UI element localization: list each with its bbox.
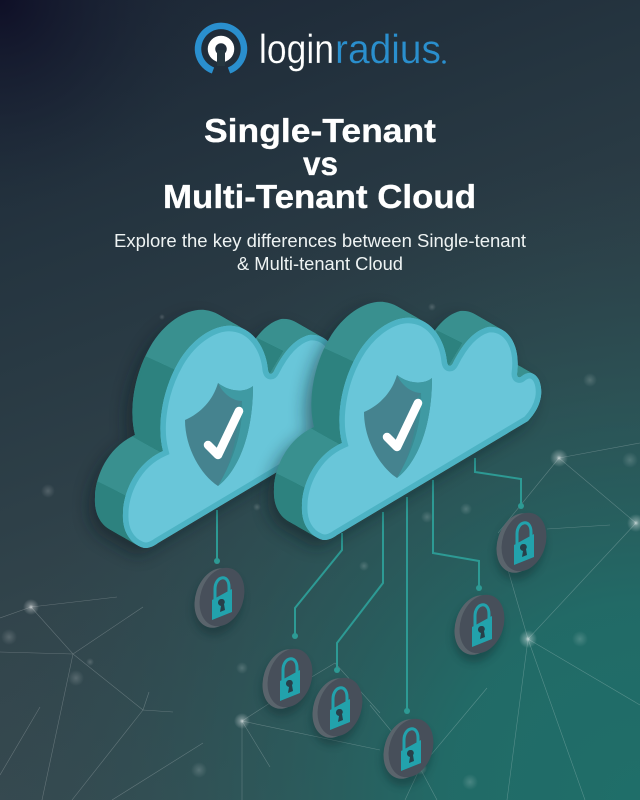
icon: logo ring — [198, 26, 244, 71]
cloud: left with shield and check — [89, 310, 362, 555]
lock: second — [253, 643, 320, 723]
logo: loginradius — [198, 26, 446, 72]
subtitle: & Multi-tenant Cloud — [237, 253, 403, 274]
title: Single-Tenant — [204, 112, 436, 149]
lock: third — [303, 672, 370, 752]
lock: fifth — [445, 589, 512, 669]
lock: fourth — [374, 713, 441, 793]
subtitle — [114, 230, 526, 274]
subtitle: Explore the key differences between Single-tenant — [114, 230, 526, 251]
wordmark radius: radius — [335, 26, 441, 72]
network mesh background — [0, 303, 640, 800]
connector lines — [214, 458, 524, 714]
lock: sixth — [487, 507, 554, 587]
cloud: right with shield and check — [268, 302, 541, 547]
wordmark dot — [442, 60, 446, 64]
wordmark login: login — [259, 26, 334, 72]
title: vs — [303, 145, 338, 182]
title — [163, 112, 476, 215]
lock: under left cloud — [185, 562, 252, 642]
title: Multi-Tenant Cloud — [163, 178, 476, 215]
